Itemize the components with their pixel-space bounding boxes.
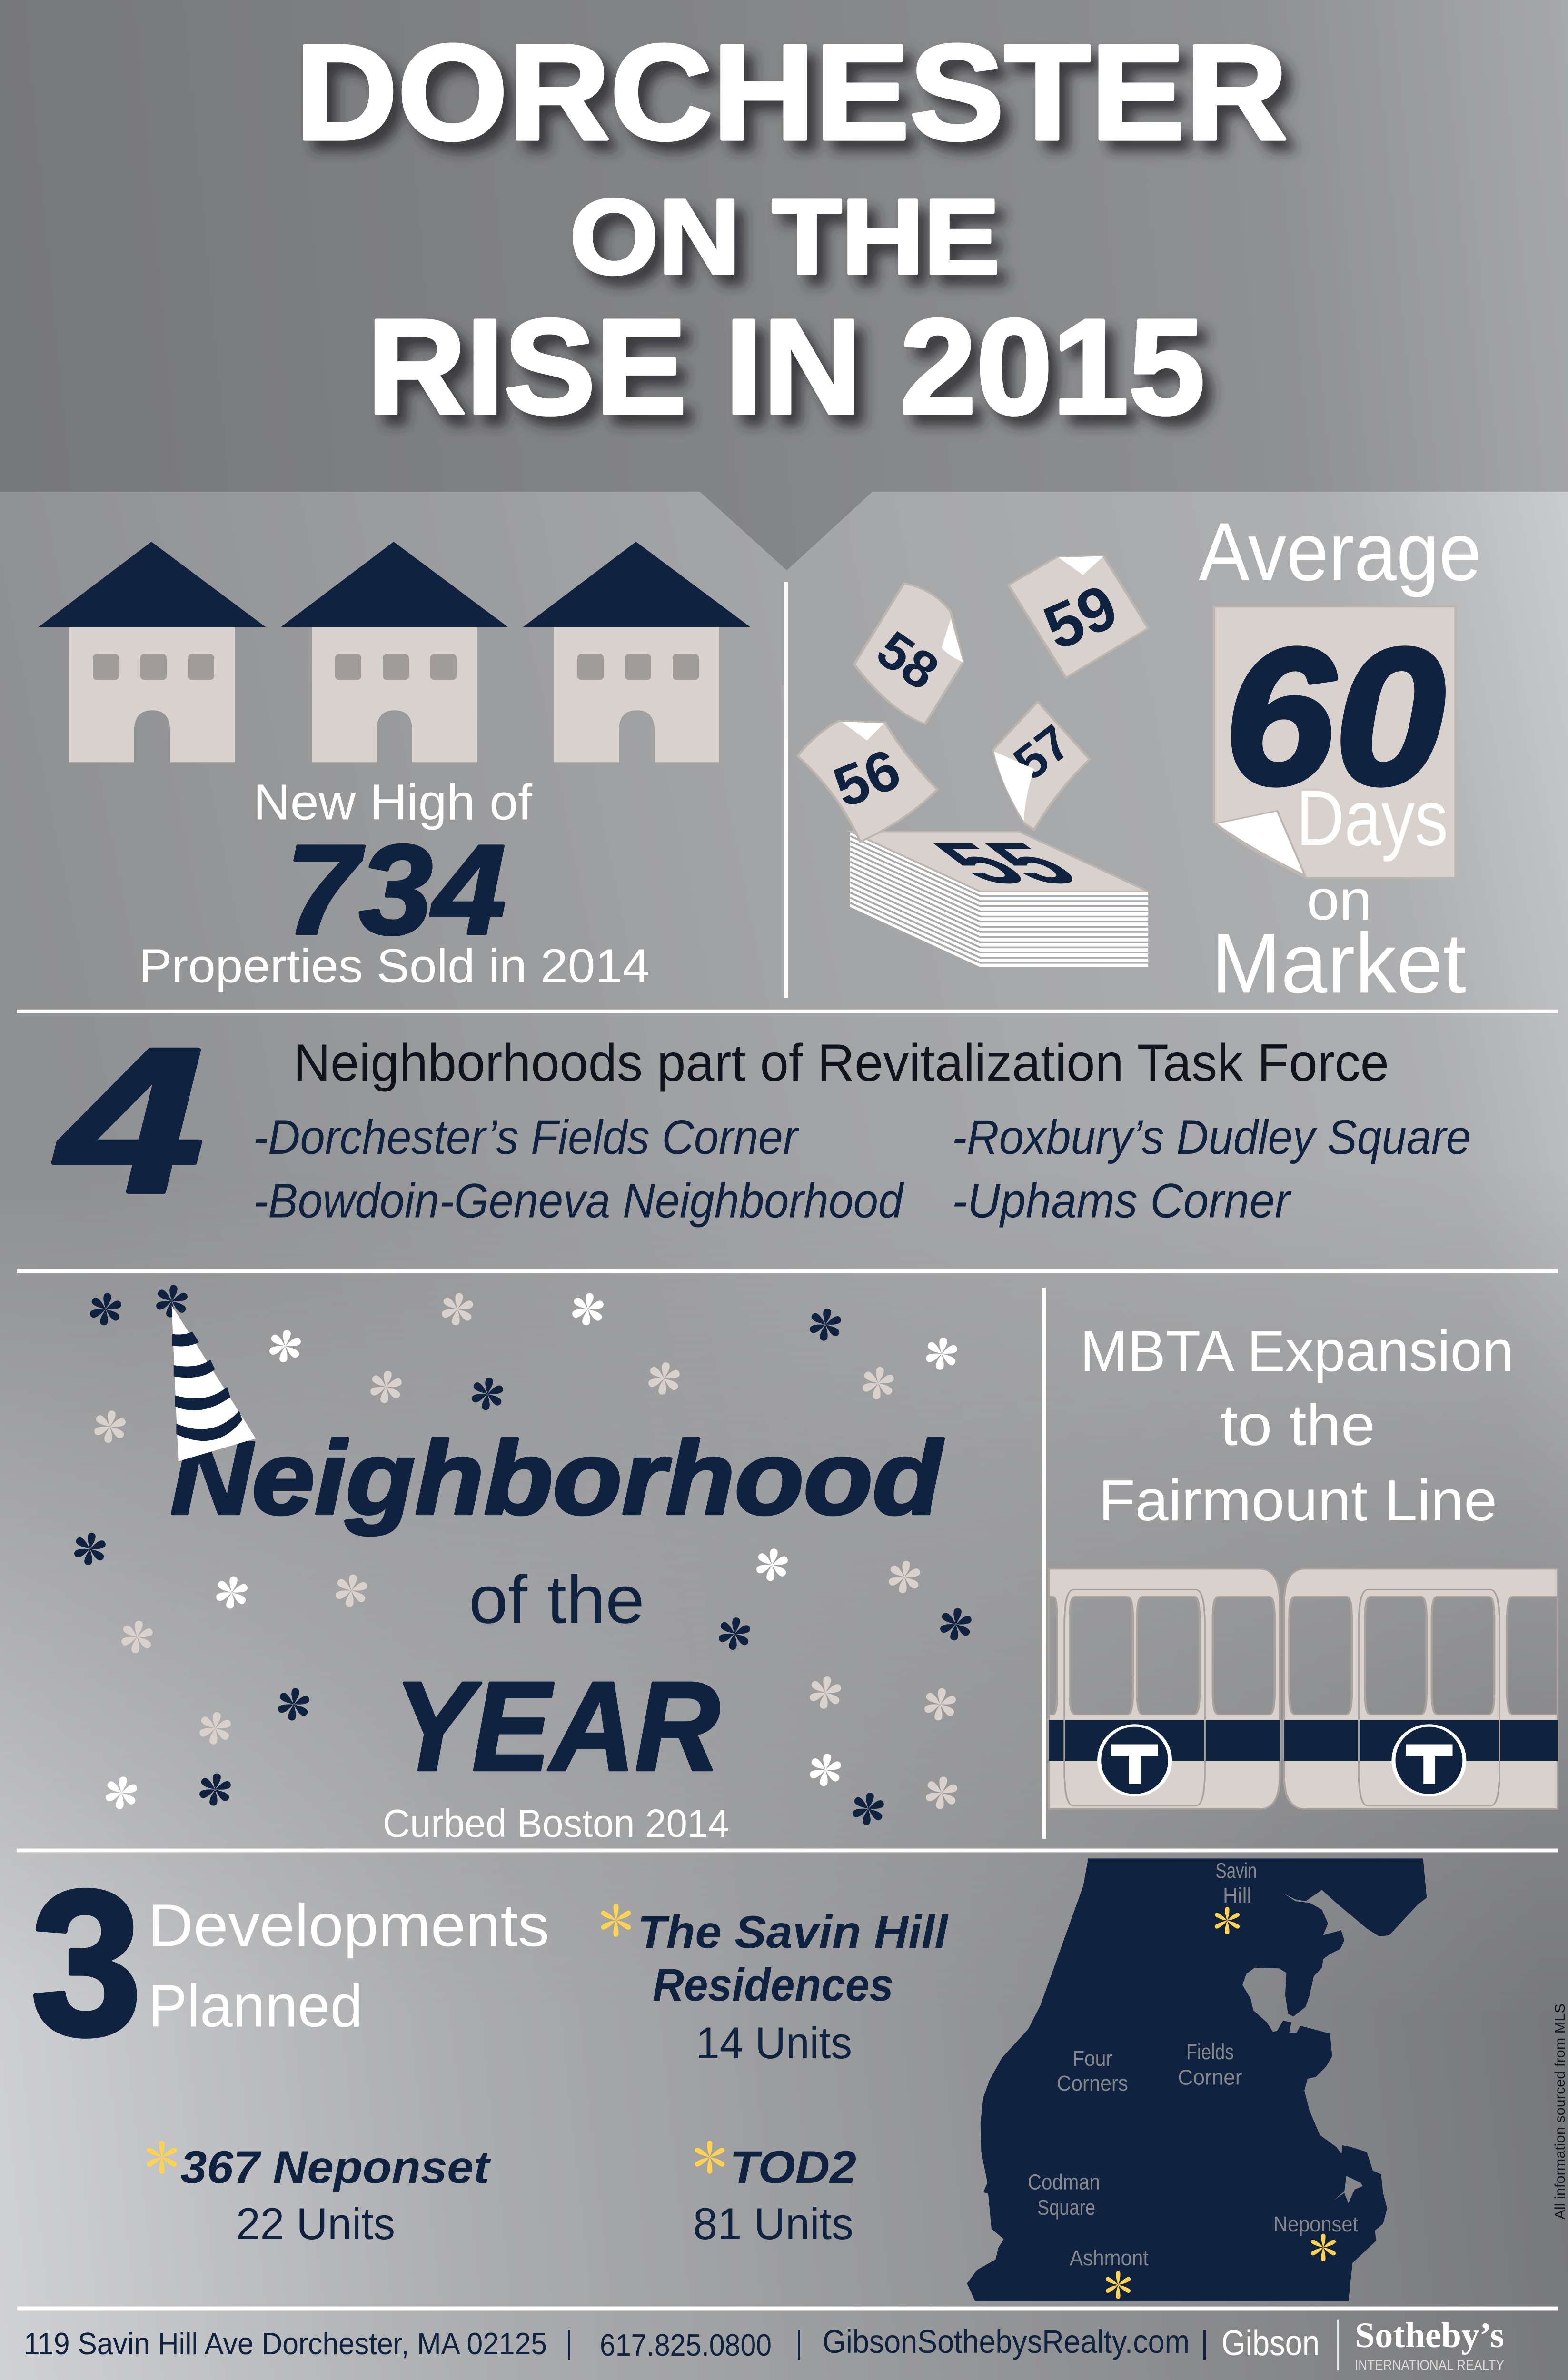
- page number 56: 56: [824, 736, 909, 820]
- icon: three houses: [39, 542, 750, 762]
- text: developments planned: [148, 1892, 549, 2039]
- neighborhood list: -Uphams Corner: [952, 1173, 1291, 1228]
- logo: Gibson Sotheby's: Sotheby’s: [1355, 2316, 1504, 2355]
- map labels: Square: [1037, 2195, 1095, 2220]
- text: developments planned: Planned: [148, 1972, 363, 2039]
- page number 58: 58: [866, 619, 949, 701]
- text: days: Days: [1296, 774, 1448, 862]
- development: the savin hill residences: Residences: [653, 1959, 893, 2011]
- illustration: falling calendar pages: [798, 556, 1148, 967]
- panel: properties sold: [39, 542, 750, 993]
- map labels: Neponset: [1273, 2212, 1358, 2236]
- map markers: [1105, 1907, 1337, 2299]
- page number 57: 57: [1003, 714, 1081, 791]
- development: TOD2: [693, 2141, 856, 2249]
- heading: MBTA expansion: to the: [1221, 1393, 1375, 1458]
- page number 59: 59: [1034, 571, 1128, 664]
- heading: MBTA expansion: [1080, 1319, 1514, 1533]
- icon: T logo right: [1393, 1726, 1464, 1795]
- title: [295, 16, 1288, 442]
- development: 367 neponset: [146, 2141, 491, 2249]
- neighborhood list: [253, 1110, 1471, 1228]
- development: the savin hill residences: The Savin Hill: [637, 1906, 949, 1958]
- text: developments planned: Developments: [148, 1892, 549, 1959]
- icon: train: [1049, 1569, 1558, 1809]
- confetti asterisks: [71, 1283, 974, 1827]
- logo: Gibson Sotheby's: INTERNATIONAL REALTY: [1355, 2358, 1504, 2373]
- development: TOD2: 81 Units: [693, 2199, 853, 2249]
- development: 367 neponset: 367 Neponset: [180, 2142, 491, 2193]
- header banner with chevron: [0, 0, 1568, 570]
- footer: [24, 2316, 1504, 2373]
- map labels: Ashmont: [1070, 2246, 1149, 2270]
- number: 734: 734: [286, 819, 506, 961]
- map labels: Codman: [1028, 2170, 1100, 2194]
- map labels: Fields: [1186, 2040, 1234, 2064]
- icon: calendar page: [1214, 606, 1456, 878]
- footer phone: 617.825.0800: [600, 2328, 772, 2362]
- neighborhood list: -Roxbury’s Dudley Square: [952, 1110, 1471, 1164]
- development: the savin hill residences: 14 Units: [696, 2018, 852, 2068]
- neighborhood list: -Dorchester’s Fields Corner: [253, 1110, 799, 1164]
- heading: neighborhoods: Neighborhoods part of Revitalization Task Force: [293, 1033, 1389, 1092]
- text: average: Average: [1199, 506, 1481, 597]
- map labels: Corners: [1057, 2071, 1128, 2095]
- map labels: Hill: [1223, 1884, 1251, 1908]
- map labels: [1028, 1859, 1358, 2270]
- heading: MBTA expansion: MBTA Expansion: [1080, 1319, 1514, 1384]
- development: TOD2: TOD2: [730, 2142, 856, 2193]
- number: 60: 60: [1224, 608, 1445, 825]
- page number 55: 55: [909, 831, 1103, 896]
- development: 367 neponset: 22 Units: [236, 2199, 395, 2249]
- neighborhood list: -Bowdoin-Geneva Neighborhood: [253, 1173, 904, 1228]
- text: new high of: New High of: [253, 774, 532, 830]
- text: neighborhood: Neighborhood: [170, 1420, 944, 1536]
- text: curbed boston 2014: Curbed Boston 2014: [383, 1802, 729, 1845]
- text: market: Market: [1211, 916, 1466, 1011]
- title: RISE IN 2015: [367, 291, 1205, 442]
- panel: MBTA expansion: [1049, 1319, 1558, 1809]
- development: the savin hill residences: [600, 1904, 949, 2068]
- panel: average 60 days on market: [1199, 506, 1481, 1011]
- panel: developments planned: [31, 1848, 949, 2249]
- map labels: Four: [1072, 2046, 1112, 2071]
- source note: All information sourced from MLS: [1552, 2003, 1568, 2220]
- title: DORCHESTER: [295, 16, 1288, 168]
- title: ON THE: [570, 177, 1000, 296]
- text: properties sold in 2014: Properties Sold in 2014: [139, 939, 650, 993]
- icon: party hat: [172, 1305, 256, 1461]
- icon: T logo left: [1099, 1726, 1170, 1795]
- text: year: YEAR: [394, 1656, 720, 1797]
- panel: neighborhood of the year: [71, 1283, 974, 1845]
- panel: revitalization task force: [50, 1006, 1471, 1236]
- map labels: Savin: [1216, 1859, 1257, 1883]
- logo: Gibson Sotheby's: Gibson: [1221, 2323, 1320, 2363]
- map of Dorchester: [967, 1858, 1427, 2301]
- text: of the: of the: [469, 1562, 645, 1637]
- heading: MBTA expansion: Fairmount Line: [1099, 1468, 1497, 1533]
- number: 4: 4: [50, 1006, 204, 1236]
- map labels: Corner: [1178, 2065, 1242, 2089]
- text: on: on: [1307, 868, 1372, 932]
- number: 3: 3: [31, 1848, 142, 2078]
- footer address: 119 Savin Hill Ave Dorchester, MA 02125: [24, 2326, 547, 2361]
- footer website: GibsonSothebysRealty.com: [823, 2323, 1190, 2360]
- logo: Gibson Sotheby's: [1221, 2316, 1504, 2373]
